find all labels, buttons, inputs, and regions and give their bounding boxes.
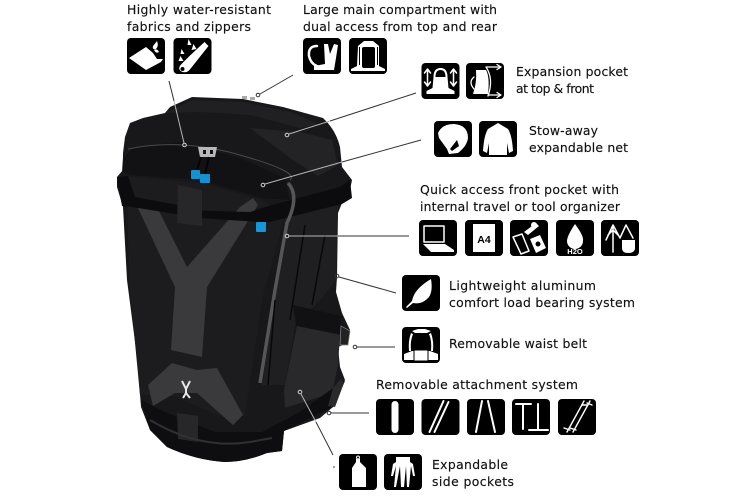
icon: phone keys passport (510, 220, 548, 256)
heading: expansion pocket: Expansion pocket (516, 64, 628, 79)
icon: helmet (434, 121, 472, 157)
leader: front pocket (285, 234, 409, 238)
icon: open pack side (303, 38, 341, 74)
icon: laptop (419, 220, 457, 256)
heading: water resistant: Highly water-resistant (127, 2, 271, 17)
stray dot (333, 466, 335, 468)
heading: main compartment: Large main compartment with (303, 2, 497, 17)
leader: side pockets (298, 390, 333, 455)
heading: waist belt: Removable waist belt (449, 336, 587, 351)
leader: waist belt (353, 345, 395, 349)
lower chevron graphic (148, 363, 243, 425)
icon: tools (601, 220, 639, 256)
bottom highlight (150, 420, 272, 444)
heading: attachment system: Removable attachment system (376, 377, 578, 392)
side mesh pocket (284, 326, 340, 408)
heading: side pockets: side pockets (432, 474, 514, 489)
top zipper seam (128, 145, 291, 180)
brand mark (182, 381, 190, 398)
top flap fold right (250, 128, 338, 176)
icon: poles apart (467, 399, 505, 435)
backpack body silhouette (117, 97, 352, 462)
side zipper (260, 183, 294, 383)
icon: pack with belt (402, 327, 440, 363)
bottom straps (141, 381, 345, 462)
icon: water drop: H2O (567, 247, 583, 256)
icon: feather (402, 275, 440, 311)
icon: water drop (556, 220, 594, 256)
icon: ice axes (512, 399, 550, 435)
icon: sweater (479, 121, 517, 157)
icon: horizontal expansion (466, 63, 504, 99)
heading: stow-away: expandable net (529, 140, 628, 155)
leader: water resistant (169, 81, 186, 147)
icon: pack rear access (349, 38, 387, 74)
leader: load bearing (335, 274, 396, 293)
icon: bottle (339, 454, 377, 490)
heading: expansion pocket: at top & front (516, 81, 594, 96)
top flap folds (165, 100, 320, 128)
icon: zipper with water (174, 38, 212, 74)
front upper pocket (122, 142, 290, 200)
leader: expansion pocket (285, 93, 416, 137)
side seams (268, 225, 325, 385)
icon: A4 document: A4 (477, 234, 491, 246)
heading: main compartment: dual access from top and rear (303, 19, 498, 34)
strap tab (177, 185, 202, 226)
Y logo graphic (137, 198, 258, 357)
icon: fabric with water (127, 38, 165, 74)
silver zipper heads (198, 147, 217, 157)
icon: ski poles (558, 399, 596, 435)
side panel (262, 200, 338, 385)
top pulls (242, 96, 255, 100)
heading: stow-away: Stow-away (529, 123, 598, 138)
icon: A4 document (465, 220, 503, 256)
heading: side pockets: Expandable (432, 457, 508, 472)
lower tab (177, 413, 198, 442)
heading: lightweight: comfort load bearing system (449, 295, 635, 310)
side pocket band (293, 305, 341, 334)
leader: attachment (327, 411, 369, 415)
waist buckle (340, 326, 350, 345)
chest straps (117, 176, 352, 222)
backpack (117, 96, 352, 462)
heading: quick access pocket: internal travel or tool organizer (420, 199, 621, 214)
front panel (126, 176, 285, 420)
heading: lightweight: Lightweight aluminum (449, 278, 596, 293)
icon: snowboard (376, 399, 414, 435)
icon: vertical expansion (422, 63, 460, 99)
zipper cords (197, 157, 209, 174)
leader: main compartment (256, 75, 293, 97)
blue zipper pulls (191, 170, 200, 179)
lower buckle (328, 379, 344, 407)
icon: skis (422, 399, 460, 435)
heading: quick access pocket: Quick access front pocket with (420, 182, 619, 197)
leader: stow-away net (261, 140, 421, 187)
heading: water resistant: fabrics and zippers (127, 19, 251, 34)
icon: tripod (384, 454, 422, 490)
